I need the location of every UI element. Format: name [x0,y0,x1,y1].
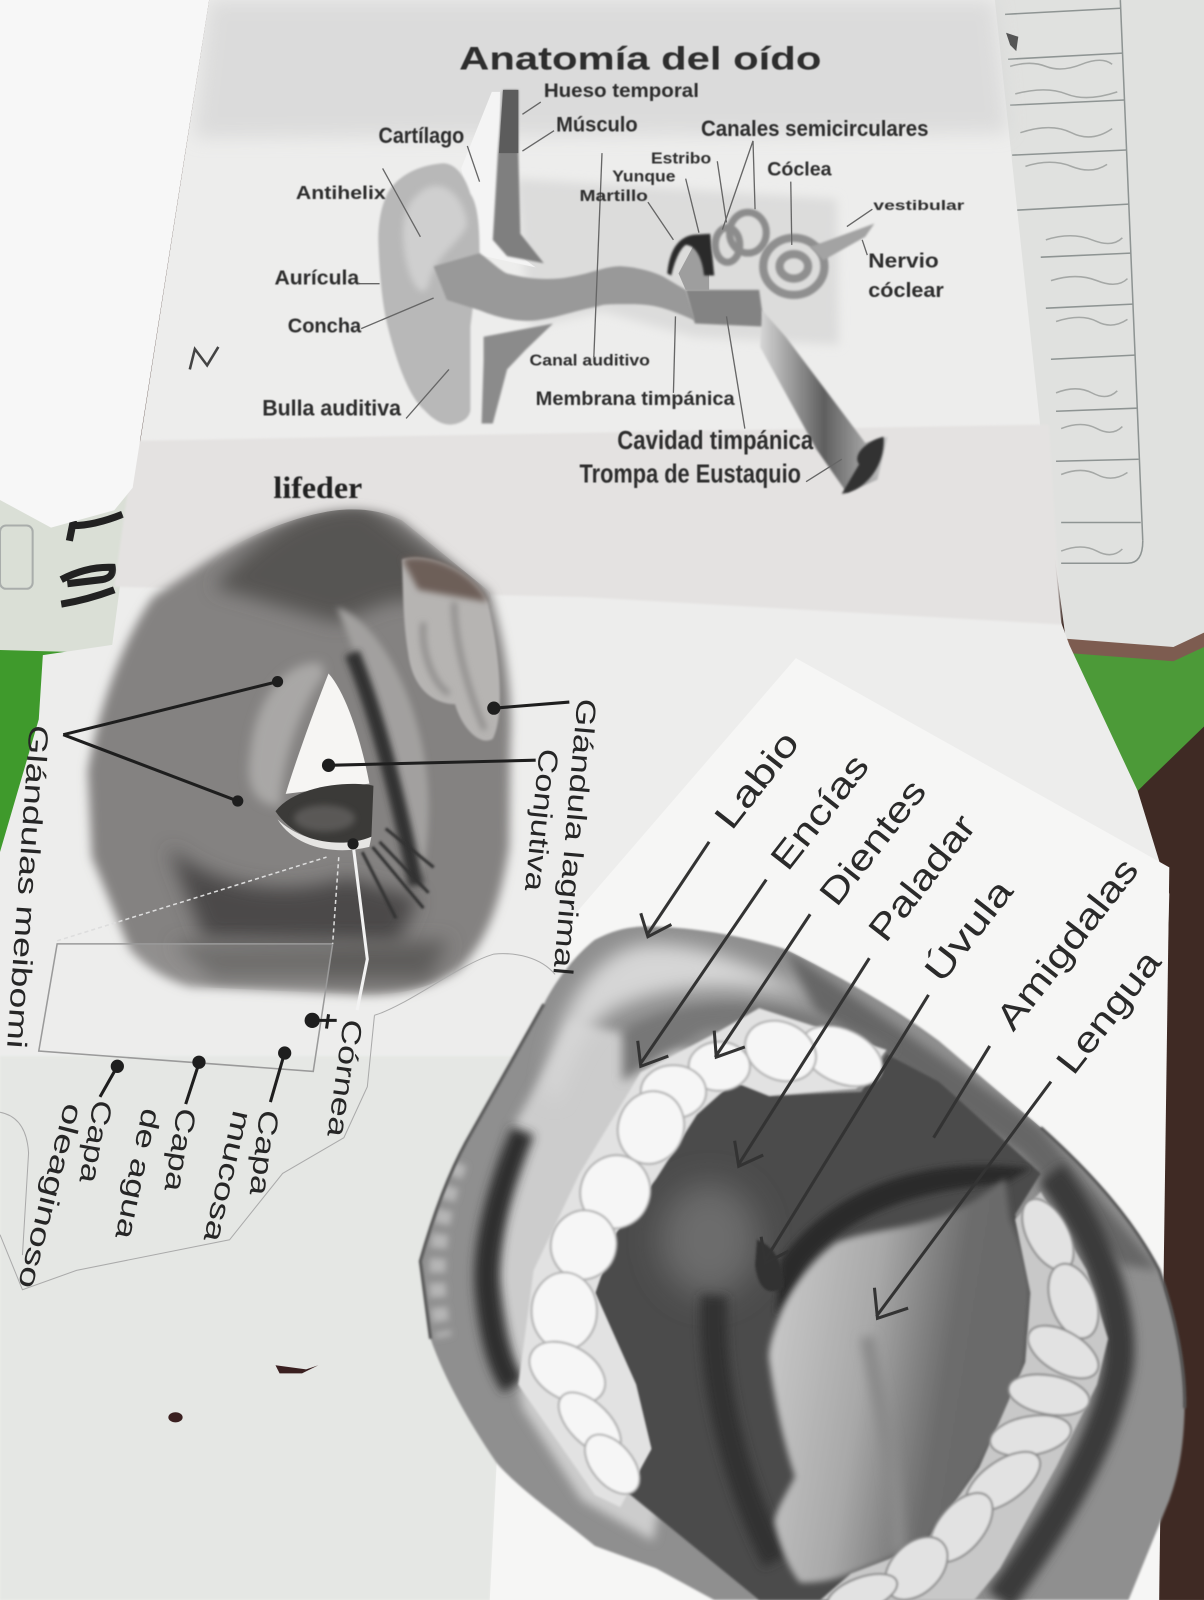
label: Antihelix: Antihelix [296,182,387,203]
meibomian glands band [249,663,324,806]
lower bone [482,324,553,423]
ear canal [434,253,695,321]
ossicle interior [679,245,709,290]
upper dark region [214,505,480,622]
gland top tint [402,557,488,602]
tongue [769,1179,1031,1583]
label: Glándulas meibomianas: Glándulas meibomianas [0,724,55,1131]
lower gum band dark [1000,1173,1119,1600]
lip interior light area [498,1020,694,1541]
eye surround [88,509,511,995]
palate and throat [595,1054,1041,1600]
label: Labio: Labio [706,723,807,837]
label: Martillo: Martillo [580,188,648,205]
ear labels [262,80,965,489]
dotted guide [57,857,339,944]
lower teeth band [820,1192,1108,1600]
eyeball [275,784,373,844]
mouth diagram [420,927,1185,1600]
label: Dientes: Dientes [811,772,934,913]
eye rim [278,819,371,850]
bright lower right paper [490,658,1169,1600]
dark lid stripe [352,653,416,886]
upper lid band [337,607,429,888]
upper gum shadow [616,1001,826,1084]
palate lighter patch [660,1184,758,1296]
mouth rim [420,1004,1185,1408]
eustachian bell [842,437,884,494]
antihelix [403,186,467,291]
semicircular canals [715,212,766,262]
mouth arrows [638,842,1051,1318]
label: Hueso temporal: Hueso temporal [544,80,699,102]
iris shading [294,805,355,832]
tympanic cavity [686,290,764,327]
green table right [1041,643,1204,791]
folded panel under the ear [114,425,1061,625]
label: Cavidad timpánica: Cavidad timpánica [617,427,814,455]
label: Trompa de Eustaquio: Trompa de Eustaquio [580,461,801,489]
bottom dark band [173,941,449,980]
label: Canales semicirculares: Canales semicirculares [701,116,929,141]
specks on paper [168,1365,318,1422]
upper lip highlight [540,934,805,1077]
top lip rim [785,949,1159,1270]
label: vestibular: vestibular [873,198,965,214]
label: Membrana timpánica: Membrana timpánica [536,388,735,410]
label: Glándula lagrimal: Glándula lagrimal [547,697,602,977]
mouth labels [706,723,1169,1081]
lower lid shadow [168,847,418,944]
label: Lengua: Lengua [1048,943,1169,1081]
label: oleaginoso line two: oleaginoso [12,1101,90,1292]
temporal strip [493,90,544,263]
left dark lip crease [487,1131,522,1386]
conjunctiva [286,673,369,794]
spiral notebook left [0,490,138,653]
upper teeth band [518,1008,887,1507]
green table left [0,643,71,857]
upper teeth [519,1010,892,1504]
white cartilage strip [461,92,536,267]
label: cóclear: cóclear [868,280,944,302]
label: Nervio: Nervio [868,250,939,272]
label: Concha: Concha [288,316,362,338]
lifeder logo: lifeder [273,471,362,505]
label: Conjutiva: Conjutiva [519,747,565,893]
soft palate fold [714,1296,775,1561]
auricle [378,163,480,425]
lower left paper [0,1056,566,1600]
cutout outline [0,954,555,1290]
label: Córnea: Córnea [321,1018,369,1140]
label: Cóclea: Cóclea [767,159,832,181]
pencil mark [190,347,218,369]
label: Encías: Encías [762,747,877,877]
label: Amigdalas: Amigdalas [988,851,1146,1038]
leader lines [359,102,872,482]
label: Cartílago: Cartílago [379,123,464,148]
uvula [755,1240,784,1291]
top left loose sheet [0,0,209,528]
label: Bulla auditiva: Bulla auditiva [262,395,401,420]
ear diagram [359,90,888,494]
label: Músculo: Músculo [556,113,638,137]
lips [420,927,1185,1600]
tongue groove [867,1337,898,1551]
label: Capa de agua: Capa [158,1106,202,1195]
gland lobes [423,602,485,730]
label: Aurícula: Aurícula [274,268,360,290]
magnified tear film box [39,944,333,1071]
eye diagram [0,505,555,1290]
label: Úvula: Úvula [917,872,1021,990]
notebook at right [980,0,1204,661]
label: Capa oleaginoso: Capa [73,1098,118,1187]
label: Canal auditivo: Canal auditivo [530,352,650,369]
eustachian tube [760,310,888,493]
label: Paladar: Paladar [860,807,984,949]
upper shaded band of sheet [194,0,1008,138]
eyelashes [362,829,434,918]
label: Yunque: Yunque [612,169,675,186]
lower teeth [822,1191,1108,1600]
eye labels [0,697,602,1292]
cochlea [763,238,824,295]
vestibular nerve [810,224,874,260]
muscle segment [499,90,518,153]
lacrimal gland [402,557,500,741]
throat shadow [775,1165,1031,1316]
temporal bone background [515,179,839,345]
title: Anatomía del oído [459,39,821,76]
label: Estribo: Estribo [651,150,711,167]
label: de agua line two: de agua [109,1106,167,1243]
label: Capa mucosa: Capa [244,1108,285,1198]
left lip stripes [437,1163,459,1337]
ossicles [667,234,714,276]
label: mucosa line two: mucosa [198,1108,258,1246]
eye pointers [63,678,569,1104]
dark speck top right [1006,33,1018,51]
